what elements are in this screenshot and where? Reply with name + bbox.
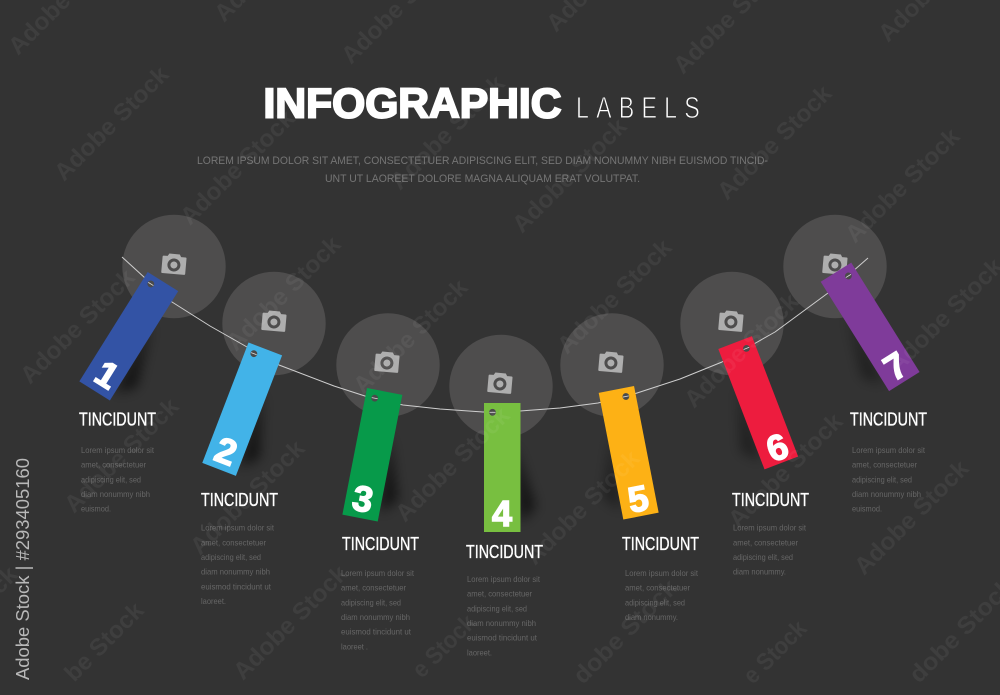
text block 3: amet, consectetuer xyxy=(341,583,406,593)
watermark pattern: Adobe Stock xyxy=(15,264,141,389)
watermark pattern: be Stock xyxy=(59,597,150,687)
label 6: red tag: 6 xyxy=(761,425,794,470)
text block 3: Lorem ipsum dolor sit xyxy=(341,568,415,578)
text block 4: Lorem ipsum dolor sit xyxy=(467,574,541,584)
subtitle text: UNT UT LAOREET DOLORE MAGNA ALIQUAM ERAT VOLUTPAT. xyxy=(325,173,640,185)
text block 7: adipiscing elit, sed xyxy=(852,474,912,484)
text block 2: laoreet. xyxy=(201,596,226,606)
subtitle text: LOREM IPSUM DOLOR SIT AMET, CONSECTETUER ADIPISCING ELIT, SED DIAM NONUMMY NIBH EUISMOD TINCID- xyxy=(197,155,768,167)
text block 7 xyxy=(850,410,927,514)
text block 2: diam nonummy nibh xyxy=(201,567,270,577)
text block 2: euismod tincidunt ut xyxy=(201,581,272,591)
text block 4: TINCIDUNT xyxy=(466,542,543,562)
text block 1 xyxy=(79,410,156,514)
watermark pattern: Adobe Stock xyxy=(840,123,966,248)
watermark pattern: Adobe Stock xyxy=(49,61,175,186)
watermark pattern: Adobe Stock xyxy=(385,70,511,195)
watermark pattern: Adobe Stock xyxy=(723,408,849,533)
watermark pattern: Adobe Stock xyxy=(712,80,838,205)
text block 1: TINCIDUNT xyxy=(79,410,156,430)
text block 6: amet, consectetuer xyxy=(733,537,798,547)
text block 4: laoreet. xyxy=(467,647,492,657)
text block 5: TINCIDUNT xyxy=(622,534,699,554)
label 1: blue tag xyxy=(79,272,192,409)
watermark pattern: Adobe Stock xyxy=(59,393,185,518)
text block 6: diam nonummy. xyxy=(733,567,786,577)
text block 7: Lorem ipsum dolor sit xyxy=(852,445,926,455)
watermark pattern: Adobe Stock xyxy=(185,435,311,560)
label 2: light blue tag xyxy=(202,342,297,483)
label 7: purple tag xyxy=(807,263,921,402)
label 2: light blue tag: 2 xyxy=(209,428,243,474)
title: INFOGRAPHIC xyxy=(264,80,562,126)
text block 1: diam nonummy nibh xyxy=(81,489,150,499)
hanging string xyxy=(122,257,868,412)
photo circles with camera icons xyxy=(122,215,887,438)
title xyxy=(264,80,700,126)
text block 2: adipiscing elit, sed xyxy=(201,552,261,562)
label 4: lime tag: 4 xyxy=(492,493,512,534)
text block 7: amet, consectetuer xyxy=(852,460,917,470)
text block 1: adipiscing elit, sed xyxy=(81,474,141,484)
text block 3: adipiscing elit, sed xyxy=(341,597,401,607)
text block 3: diam nonummy nibh xyxy=(341,612,410,622)
label 5: amber tag xyxy=(583,386,659,526)
watermark pattern: Adobe Stock xyxy=(520,445,646,570)
watermark pattern: e Stock xyxy=(407,609,482,683)
watermark pattern: Adobe Stock xyxy=(849,455,975,580)
label 7: purple tag: 7 xyxy=(876,344,915,389)
watermark pattern: Adobe Stock xyxy=(390,402,516,527)
text block 4: diam nonummy nibh xyxy=(467,618,536,628)
text block 4: adipiscing elit, sed xyxy=(467,603,527,613)
watermark pattern: Adobe Stock xyxy=(228,560,354,685)
label 6: red tag xyxy=(703,336,800,479)
text block 4: amet, consectetuer xyxy=(467,589,532,599)
text block 1: euismod. xyxy=(81,504,111,514)
watermark pattern: Adobe Stock xyxy=(507,113,633,238)
text block 7: euismod. xyxy=(852,504,882,514)
subtitle text xyxy=(197,155,768,185)
text block 4: euismod tincidunt ut xyxy=(467,633,538,643)
text block 4 xyxy=(466,542,543,657)
label 3: green tag xyxy=(342,388,418,526)
watermark pattern: e Stock xyxy=(738,615,813,689)
text block 2: Lorem ipsum dolor sit xyxy=(201,523,275,533)
text block 3 xyxy=(341,534,419,651)
text block 5 xyxy=(622,534,699,622)
text block 6: adipiscing elit, sed xyxy=(733,552,793,562)
watermark pattern: Adobe Stock xyxy=(175,105,301,230)
text block 5: adipiscing elit, sed xyxy=(625,597,685,607)
watermark pattern: Adobe Stock xyxy=(679,288,805,413)
label 4: lime tag xyxy=(484,403,536,534)
watermark pattern: Adobe Stock xyxy=(221,231,347,356)
label 1: blue tag: 1 xyxy=(88,352,127,397)
text block 3: laoreet . xyxy=(341,641,368,651)
text block 6: Lorem ipsum dolor sit xyxy=(733,523,807,533)
text block 2: TINCIDUNT xyxy=(201,490,278,510)
text block 3: euismod tincidunt ut xyxy=(341,627,412,637)
watermark pattern: Adobe Stock xyxy=(552,234,678,359)
text block 7: diam nonummy nibh xyxy=(852,489,921,499)
text block 2 xyxy=(201,490,278,606)
text block 5: amet, consectetuer xyxy=(625,583,690,593)
text block 6 xyxy=(732,490,809,577)
label 3: green tag: 3 xyxy=(349,477,377,521)
text block 6: TINCIDUNT xyxy=(732,490,809,510)
watermark pattern: dobe Stock xyxy=(568,574,684,689)
text block 7: TINCIDUNT xyxy=(850,410,927,430)
text block 1: Lorem ipsum dolor sit xyxy=(81,445,155,455)
text block 5: Lorem ipsum dolor sit xyxy=(625,568,699,578)
text block 3: TINCIDUNT xyxy=(342,534,419,554)
label 5: amber tag: 5 xyxy=(624,477,652,521)
text block 2: amet, consectetuer xyxy=(201,537,266,547)
text block 1: amet, consectetuer xyxy=(81,460,146,470)
watermark pattern: Adobe Stock xyxy=(348,274,474,399)
text block 5: diam nonummy. xyxy=(625,612,678,622)
stock id side text: Adobe Stock | #293405160 xyxy=(13,458,33,680)
title: LABELS xyxy=(576,90,700,125)
